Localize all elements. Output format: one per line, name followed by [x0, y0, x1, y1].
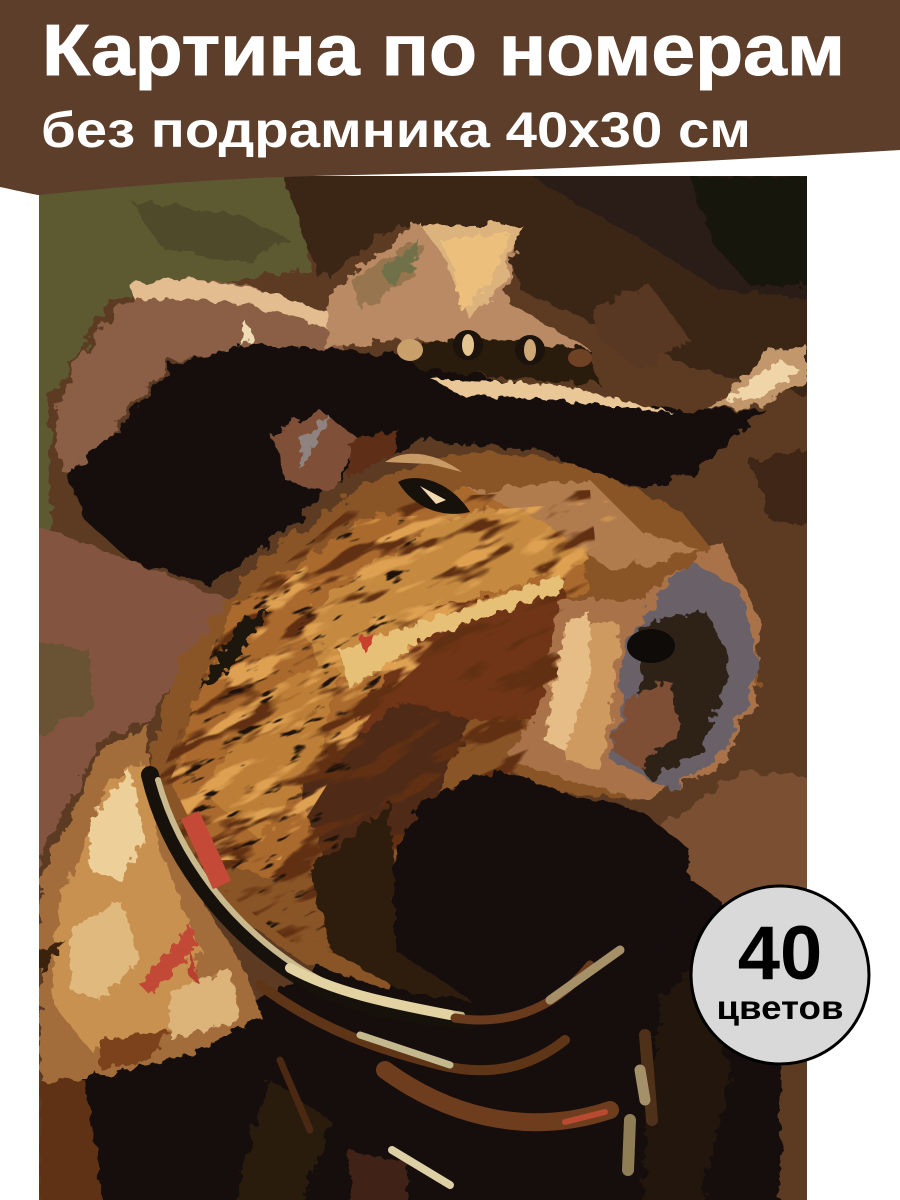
- chest dark: [39, 880, 784, 1200]
- badge: 40 colours: цветов: [716, 989, 844, 1026]
- fur mottling: [160, 490, 595, 954]
- badge: 40 colours: [691, 886, 869, 1064]
- hat band studs: [397, 330, 592, 367]
- title: Картина по номерам: [42, 11, 845, 91]
- header banner: [0, 0, 900, 195]
- capybara head and neck: [148, 450, 764, 990]
- scarf: [40, 725, 262, 1080]
- subtitle: без подрамника 40х30 см: [41, 102, 751, 158]
- capybara eye: [385, 454, 470, 514]
- painting: capybara in a cowboy hat: [0, 170, 820, 1200]
- collar: [150, 775, 652, 1185]
- painting background: [20, 170, 820, 1200]
- capybara lower shadow: [310, 770, 690, 1010]
- cowboy hat: [55, 225, 807, 585]
- capybara nostril: [627, 629, 675, 663]
- badge: 40 colours: 40: [738, 911, 822, 996]
